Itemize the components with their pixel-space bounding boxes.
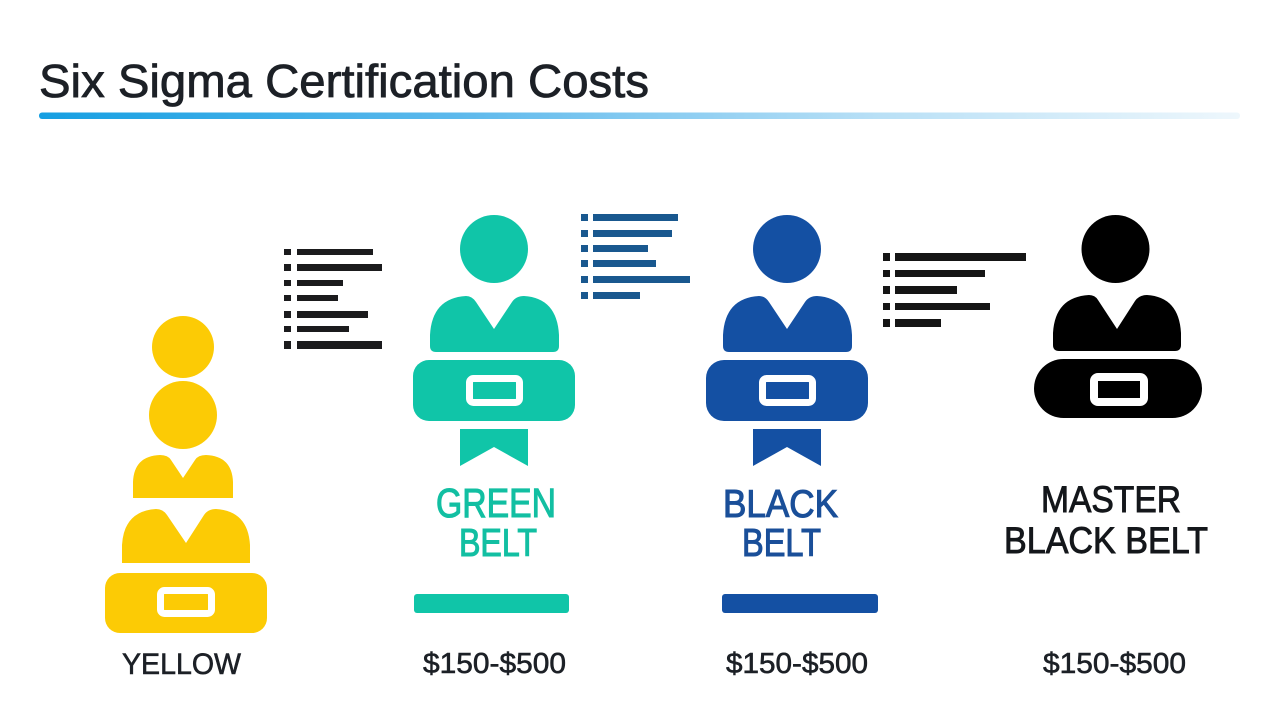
icon: yellow belt figure bbox=[105, 316, 267, 633]
panel: green belt bbox=[413, 214, 690, 680]
label: green belt: GREEN bbox=[436, 480, 556, 526]
label: master black belt: MASTER bbox=[1041, 479, 1181, 520]
label: green belt: BELT bbox=[459, 522, 537, 565]
label: black belt bbox=[723, 483, 838, 565]
label: master black belt bbox=[1004, 479, 1208, 561]
icon: blue belt figure bbox=[706, 215, 868, 466]
list: master black belt bullets bbox=[883, 253, 1026, 327]
panel: master black belt bbox=[883, 215, 1208, 680]
label: yellow: YELLOW bbox=[122, 648, 242, 681]
list: yellow belt bullets bbox=[284, 249, 382, 349]
cost bar: black belt bbox=[722, 594, 878, 613]
panel: black belt (blue) bbox=[706, 215, 878, 680]
icon: green belt figure bbox=[413, 215, 575, 466]
label: black belt: BLACK bbox=[723, 483, 838, 526]
label: black belt: BELT bbox=[742, 522, 821, 565]
list: green belt bullets bbox=[581, 214, 690, 299]
title underline bbox=[39, 112, 1240, 119]
label: green belt bbox=[436, 480, 556, 565]
icon: black belt figure bbox=[1034, 215, 1202, 418]
cost: green belt: $150-$500 bbox=[423, 648, 566, 680]
title: Six Sigma Certification Costs bbox=[39, 55, 649, 107]
panel: yellow belt bbox=[105, 249, 382, 681]
cost: black belt: $150-$500 bbox=[726, 648, 868, 680]
label: master black belt: BLACK BELT bbox=[1004, 520, 1208, 561]
cost bar: green bbox=[414, 594, 569, 613]
cost: master black belt: $150-$500 bbox=[1043, 648, 1186, 680]
